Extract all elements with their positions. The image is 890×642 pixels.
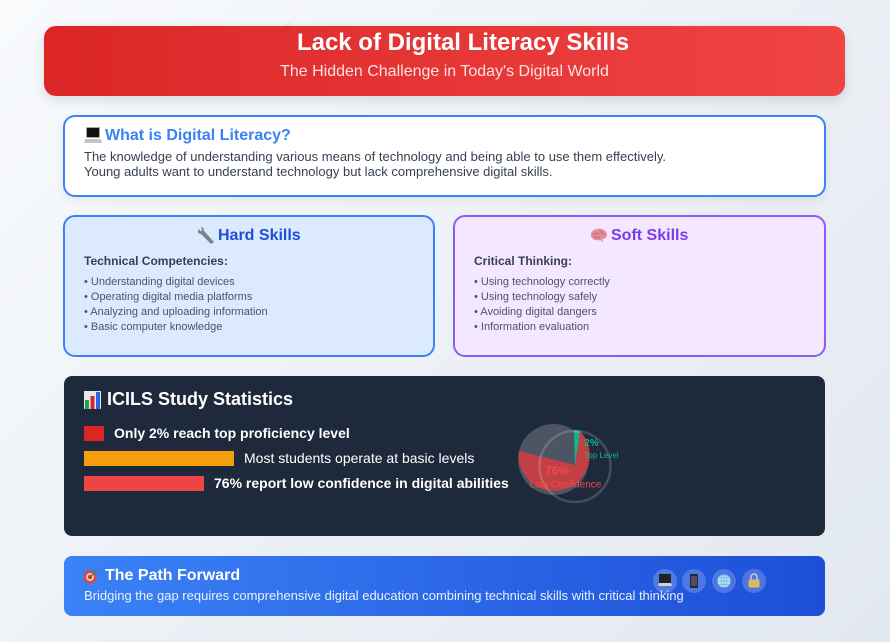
icon: brain: [590, 228, 607, 242]
icon: globe badge: [712, 569, 736, 593]
description: The knowledge of understanding various means of technology and being able to use them effectively.: [84, 149, 666, 164]
panel: ICILS statistics: [64, 376, 825, 536]
skill list: • Avoiding digital dangers: [474, 306, 597, 318]
icon: bar chart: [84, 391, 101, 409]
skill list: [474, 276, 610, 333]
icon: laptop: [84, 127, 102, 143]
subheading: Critical Thinking:: [474, 254, 572, 268]
stat bar: low confidence: [84, 476, 204, 491]
skill list: • Using technology safely: [474, 291, 597, 303]
green slice: top level: [574, 430, 580, 465]
icon: phone badge: [682, 569, 706, 593]
label: low confidence: Low Confidence: [530, 480, 602, 490]
stat bar: top proficiency: [84, 426, 104, 441]
skill list: • Analyzing and uploading information: [84, 306, 268, 318]
label: top level: Top Level: [584, 451, 619, 460]
icon: target: [84, 570, 98, 584]
heading: ICILS Study Statistics: [107, 389, 293, 409]
label: 76%: 76%: [545, 464, 569, 478]
icon: lock badge: [742, 569, 766, 593]
heading: The Path Forward: [105, 567, 240, 584]
stat label: top proficiency: Only 2% reach top proficiency level: [114, 425, 350, 441]
skill list: • Operating digital media platforms: [84, 291, 252, 303]
panel: soft skills: [453, 215, 826, 357]
label: 2%: 2%: [584, 438, 599, 449]
skill list: • Information evaluation: [474, 321, 589, 333]
subheading: Technical Competencies:: [84, 254, 228, 268]
panel: the path forward: [64, 556, 825, 616]
skill list: • Understanding digital devices: [84, 276, 235, 288]
icon: laptop badge: [653, 569, 677, 593]
panel: hard skills: [63, 215, 435, 357]
stat label: low confidence: 76% report low confidence in digital abilities: [214, 475, 509, 491]
header banner: [44, 26, 845, 96]
skill list: [84, 276, 268, 333]
chart base circle: [518, 424, 589, 495]
decorative smudge: [286, 22, 290, 26]
stat bar: basic levels: [84, 451, 234, 466]
stat label: basic levels: Most students operate at basic levels: [244, 450, 474, 466]
heading: Soft Skills: [611, 227, 688, 244]
skill list: • Using technology correctly: [474, 276, 610, 288]
description: Young adults want to understand technology but lack comprehensive digital skills.: [84, 164, 553, 179]
skill list: • Basic computer knowledge: [84, 321, 222, 333]
heading: Hard Skills: [218, 227, 301, 244]
icon: wrench: [198, 227, 214, 244]
description: Bridging the gap requires comprehensive digital education combining technical skills with critical thinking: [84, 588, 684, 603]
title: Lack of Digital Literacy Skills: [297, 29, 629, 56]
red slice: low confidence: [519, 431, 590, 491]
subtitle: The Hidden Challenge in Today's Digital World: [280, 63, 609, 80]
heading: What is Digital Literacy?: [105, 127, 291, 144]
ring: [540, 431, 610, 502]
panel: what is digital literacy: [63, 115, 826, 197]
description: [84, 149, 666, 179]
